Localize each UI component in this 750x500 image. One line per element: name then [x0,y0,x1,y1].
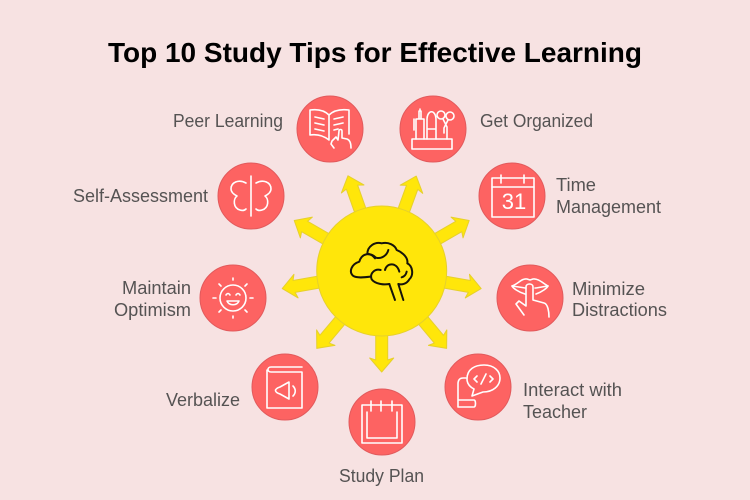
item: Minimize Distractions: Distractions [572,300,667,320]
item: Time Management [479,163,661,229]
item: Get Organized: Get Organized [480,111,593,131]
item: Self-Assessment: Self-Assessment [73,186,208,206]
item: Peer Learning [173,96,363,162]
central sun with arrows [280,172,483,372]
item: Time Management: Time [556,175,596,195]
item: Maintain Optimism [114,265,266,331]
icon: brain [351,243,412,300]
item: Interact with Teacher: Teacher [523,402,587,422]
item: Minimize Distractions: Minimize [572,279,645,299]
item: Maintain Optimism: Optimism [114,300,191,320]
item: Interact with Teacher: Interact with [523,380,622,400]
title: Top 10 Study Tips for Effective Learning [108,37,642,68]
item: Peer Learning: Peer Learning [173,111,283,131]
item: Minimize Distractions [497,265,667,331]
item: Study Plan: Study Plan [339,466,424,486]
item: Verbalize: Verbalize [166,390,240,410]
item: Time Management: 31 [502,189,526,214]
item: Verbalize [166,354,318,420]
item: Get Organized [400,96,593,162]
item: Interact with Teacher [445,354,622,422]
item: Self-Assessment [73,163,284,229]
item: Maintain Optimism: Maintain [122,278,191,298]
item: Time Management: Management [556,197,661,217]
item: Study Plan [339,389,424,486]
